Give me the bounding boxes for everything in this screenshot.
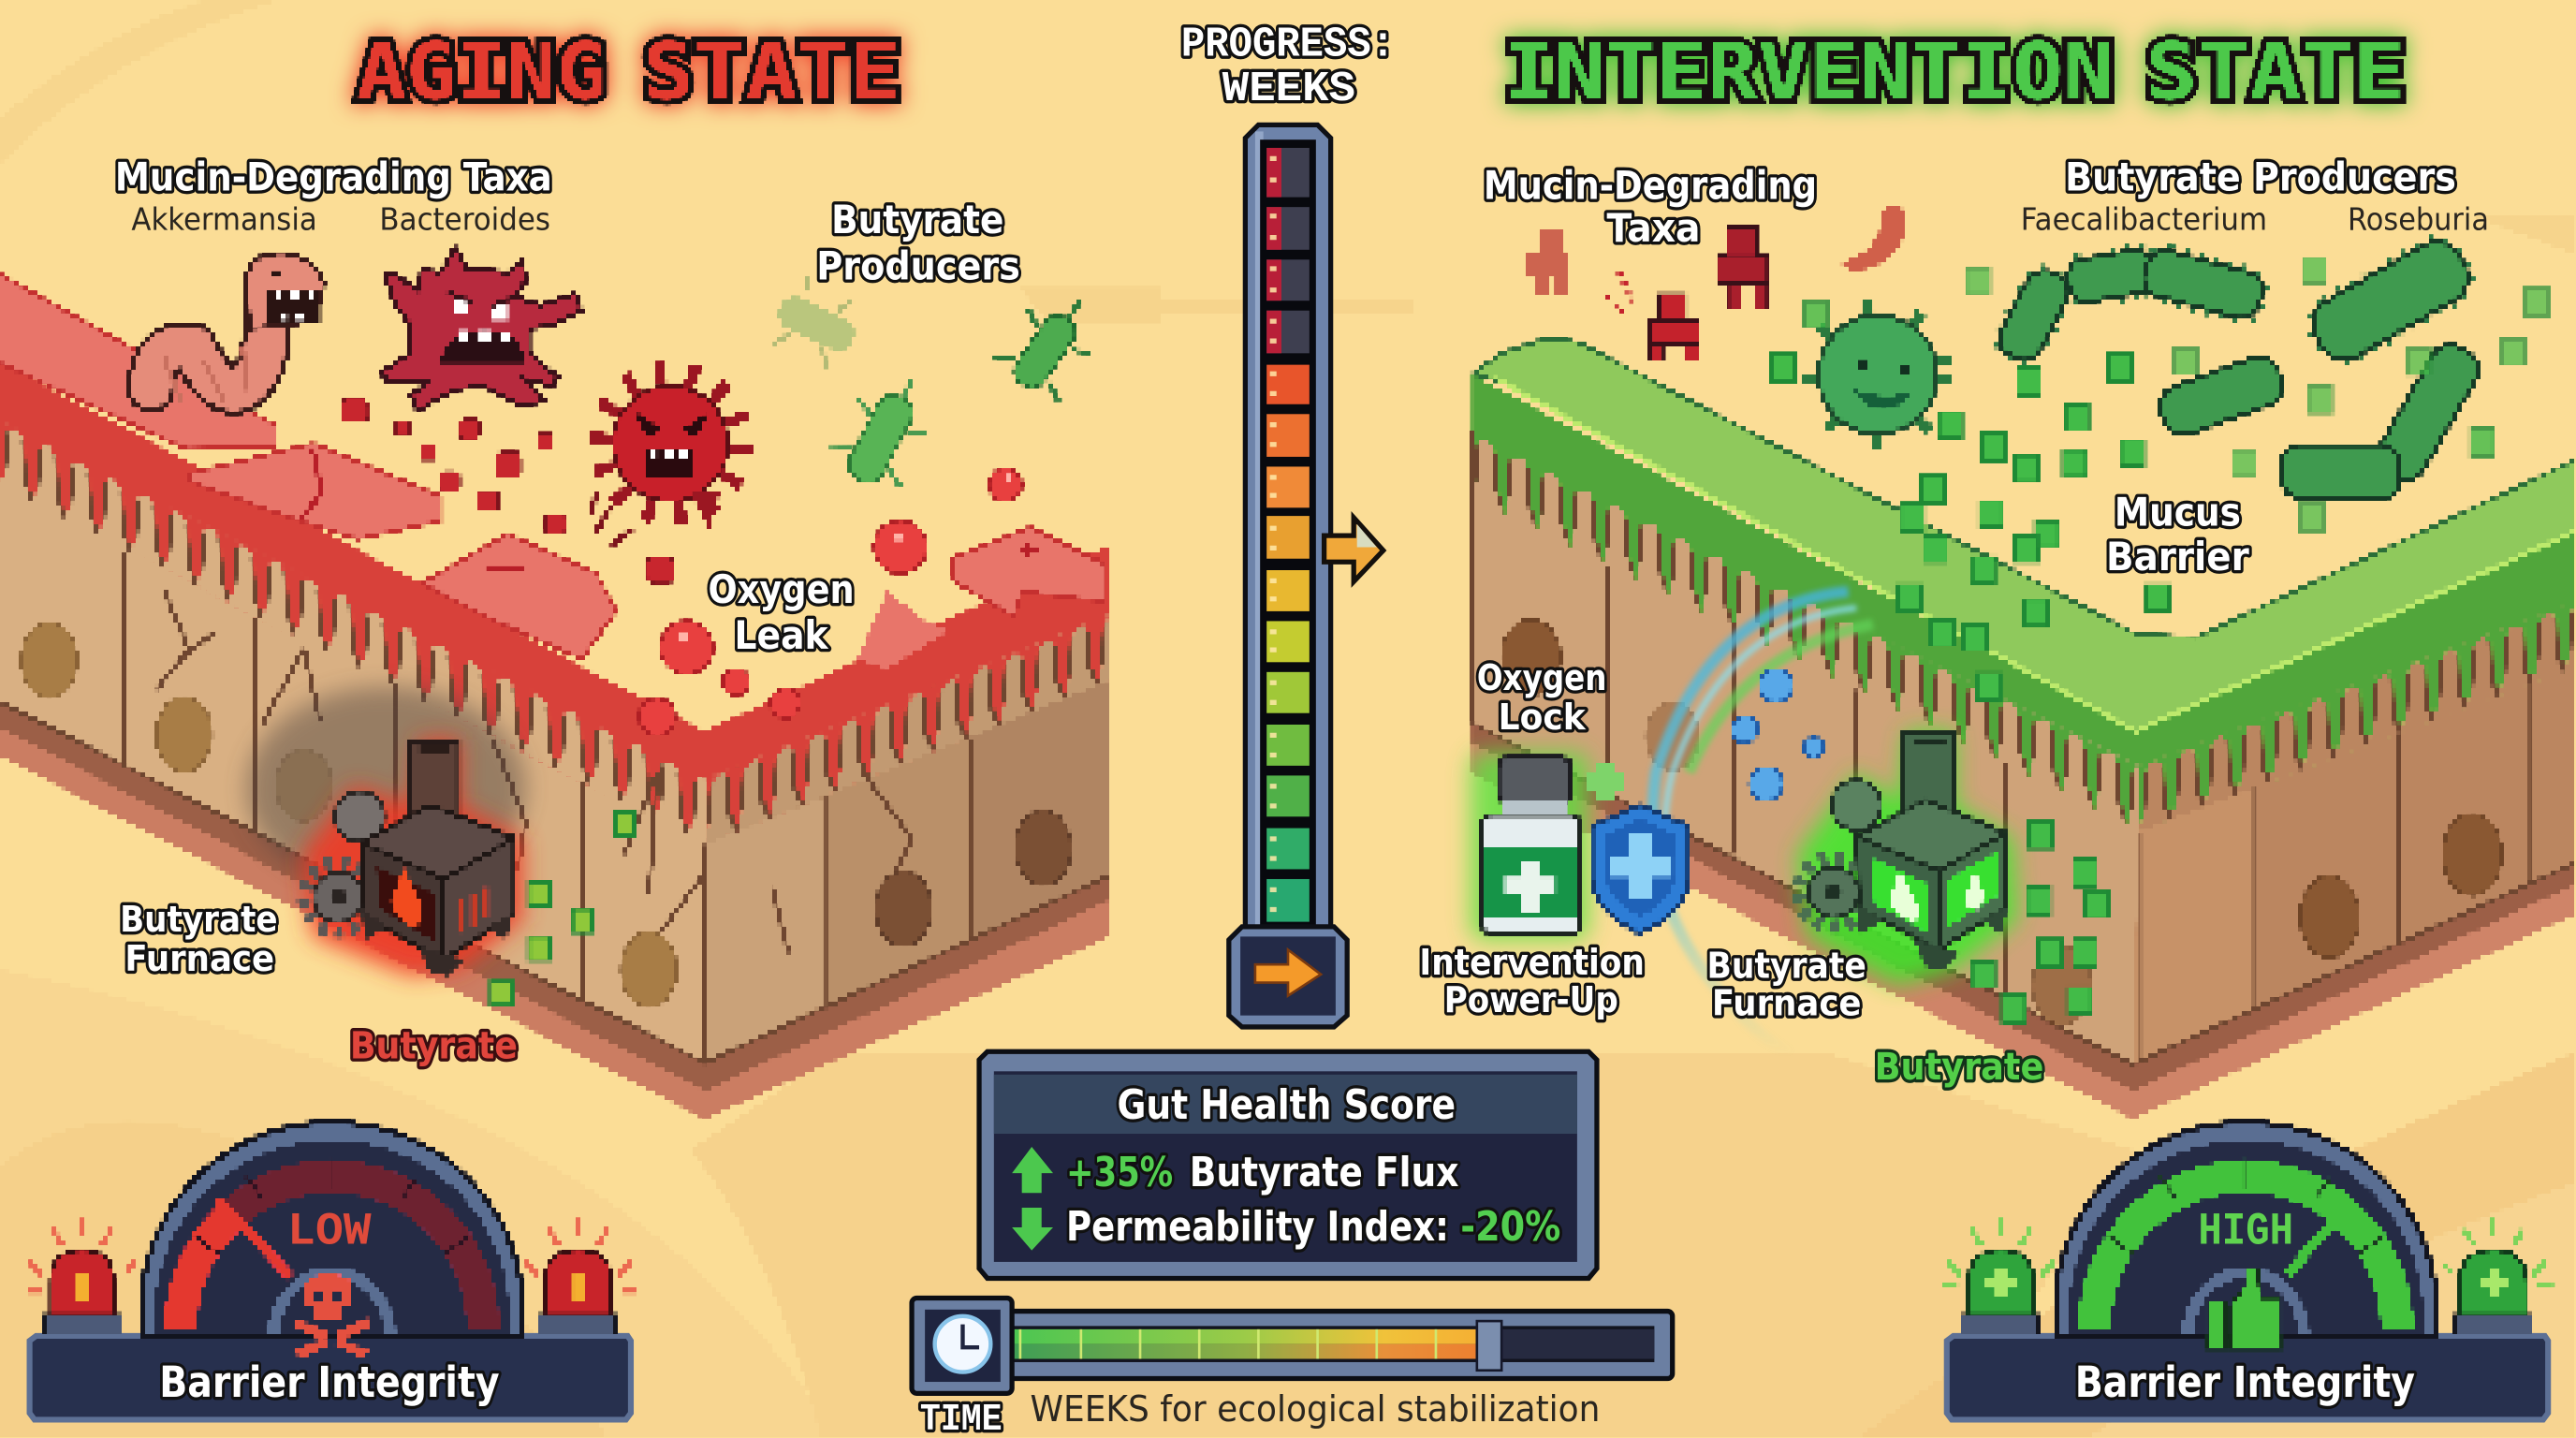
meter cells bbox=[1266, 148, 1310, 922]
metric: butyrate flux: +35% bbox=[1066, 1149, 1173, 1196]
label: Oxygen Leak: Leak bbox=[735, 612, 828, 658]
label: Butyrate Furnace: Furnace bbox=[1712, 983, 1862, 1025]
thumbs up icon bbox=[2208, 1269, 2280, 1349]
label: Oxygen Lock: Oxygen bbox=[1477, 657, 1606, 699]
retreating mucin degraders bbox=[1526, 206, 1906, 360]
skull icon bbox=[292, 1273, 372, 1358]
label: Mucin-Degrading Taxa: Taxa bbox=[1606, 205, 1701, 251]
metric: permeability index: -20% bbox=[1460, 1203, 1560, 1251]
label: Butyrate (green): Butyrate bbox=[1875, 1045, 2043, 1089]
title: aging state bbox=[357, 25, 900, 117]
title: intervention state: STATE bbox=[2145, 25, 2405, 117]
label: Oxygen Lock: Lock bbox=[1499, 697, 1587, 739]
label: Butyrate Furnace: Butyrate bbox=[1707, 945, 1866, 987]
title: intervention state: INTERVENTION bbox=[1503, 25, 2115, 117]
gut block: aging wall and eroded mucus bbox=[0, 274, 1109, 1119]
mucus front band bbox=[1472, 374, 2576, 838]
gauge: aging barrier integrity bbox=[26, 1123, 637, 1419]
furnace: restored bbox=[1799, 733, 2008, 970]
rod cilia bbox=[1994, 232, 2477, 369]
cell dividers bbox=[1472, 433, 2576, 1064]
ground shadow bbox=[0, 701, 1109, 1119]
shield bbox=[1592, 805, 1689, 933]
wall faces bbox=[1472, 498, 2139, 1064]
label: Faecalibacterium: Faecalibacterium bbox=[2021, 201, 2267, 238]
Faecalibacterium and Roseburia rods bbox=[1994, 232, 2485, 498]
progress label: WEEKS bbox=[1222, 65, 1355, 113]
label: Butyrate Furnace: Furnace bbox=[124, 938, 274, 980]
label: Intervention Power-Up: Power-Up bbox=[1444, 979, 1618, 1021]
HIGH readout: HIGH bbox=[2198, 1206, 2293, 1258]
green friendly microbe bbox=[1812, 309, 1943, 440]
arrow up bbox=[1012, 1147, 1053, 1193]
metric: butyrate flux: Butyrate Flux bbox=[1190, 1149, 1459, 1196]
label: Bacteroides: Bacteroides bbox=[379, 201, 550, 238]
meter tube bbox=[1245, 125, 1331, 930]
label: Mucus Barrier: Barrier bbox=[2106, 534, 2249, 580]
furnace smoke and red glow bbox=[246, 687, 526, 976]
label: Butyrate (red): Butyrate bbox=[350, 1023, 518, 1067]
time caption: WEEKS for ecological stabilization bbox=[1030, 1388, 1600, 1431]
aging state scene bbox=[0, 154, 1113, 1119]
arrow down bbox=[1012, 1208, 1053, 1251]
label: Mucin-Degrading Taxa: Mucin-Degrading Taxa bbox=[115, 154, 552, 200]
plus icon bbox=[1586, 762, 1625, 801]
gauge base bbox=[1947, 1336, 2548, 1419]
butyrate particles bbox=[491, 812, 634, 1005]
label: Butyrate Producers: Butyrate Producers bbox=[2065, 154, 2456, 200]
label: Butyrate Producers: Producers bbox=[816, 242, 1020, 288]
cell dividers bbox=[0, 550, 1109, 1064]
sprites: intervention bbox=[1482, 206, 2548, 1022]
side arrow pointer bbox=[1325, 518, 1383, 581]
label: Akkermansia: Akkermansia bbox=[131, 201, 317, 238]
mucus band bbox=[0, 363, 1109, 855]
metric: permeability index: Permeability Index: bbox=[1066, 1203, 1449, 1251]
label: Oxygen Leak: Oxygen bbox=[708, 566, 855, 612]
label: Roseburia: Roseburia bbox=[2348, 201, 2489, 238]
label: Butyrate Furnace: Butyrate bbox=[120, 899, 278, 941]
gut health score panel bbox=[979, 1051, 1597, 1278]
label: Mucin-Degrading Taxa: Mucin-Degrading bbox=[1484, 162, 1817, 208]
nuclei bbox=[1501, 620, 2502, 1025]
barrier integrity label: Barrier Integrity bbox=[2075, 1357, 2415, 1407]
shield swoosh bbox=[1653, 592, 1873, 1055]
mucus chunks bbox=[0, 274, 276, 448]
clock box bbox=[912, 1299, 1012, 1393]
gauge: intervention barrier integrity bbox=[1942, 1123, 2553, 1419]
intervention state scene bbox=[1419, 154, 2576, 1119]
villi bbox=[0, 420, 705, 844]
progress meter bbox=[1181, 21, 1395, 1027]
label: Intervention Power-Up: Intervention bbox=[1419, 942, 1645, 984]
track bbox=[1005, 1312, 1673, 1379]
title: intervention state bbox=[1503, 25, 2405, 117]
label: Butyrate Producers: Butyrate bbox=[831, 197, 1003, 242]
gauge art bbox=[1942, 1123, 2553, 1349]
furnace: failing bbox=[304, 741, 514, 976]
LOW readout: LOW bbox=[287, 1206, 372, 1258]
mucus top surface bbox=[1472, 339, 2576, 731]
score title: Gut Health Score bbox=[1117, 1081, 1456, 1129]
oxygen lock bubbles bbox=[1732, 668, 1823, 800]
gauge art bbox=[26, 1123, 637, 1358]
progress label: PROGRESS: bbox=[1181, 21, 1395, 69]
gut block: healthy wall and intact mucus bbox=[1472, 339, 2576, 1119]
green glows bbox=[1471, 731, 2017, 986]
label: Mucus Barrier: Mucus bbox=[2115, 490, 2241, 536]
time bar bbox=[912, 1299, 1673, 1438]
worm: Akkermansia bbox=[151, 253, 324, 401]
monster: Bacteroides bbox=[381, 248, 581, 411]
title: aging state: STATE bbox=[642, 25, 900, 117]
alarm lights bbox=[51, 1251, 113, 1314]
intervention bottle bbox=[1482, 757, 1580, 933]
butyrate particles bbox=[1771, 258, 2548, 1022]
barrier integrity label: Barrier Integrity bbox=[159, 1357, 500, 1407]
butyrate producers: weak bacteria bbox=[766, 271, 1113, 498]
status lights bbox=[1969, 1251, 2034, 1314]
monster: spiky bbox=[605, 378, 736, 529]
meter base with arrow bbox=[1229, 927, 1347, 1027]
score header bbox=[994, 1075, 1577, 1134]
gauge base bbox=[30, 1336, 631, 1419]
oxygen leak bubbles bbox=[639, 468, 1022, 735]
debris bbox=[342, 399, 674, 583]
wall faces bbox=[0, 487, 705, 1064]
sprites: aging bbox=[151, 248, 1113, 1005]
nuclei bbox=[22, 623, 677, 1007]
title: aging state: AGING bbox=[357, 25, 607, 117]
villi bbox=[1472, 433, 2139, 831]
ground shadow bbox=[1472, 723, 2576, 1119]
